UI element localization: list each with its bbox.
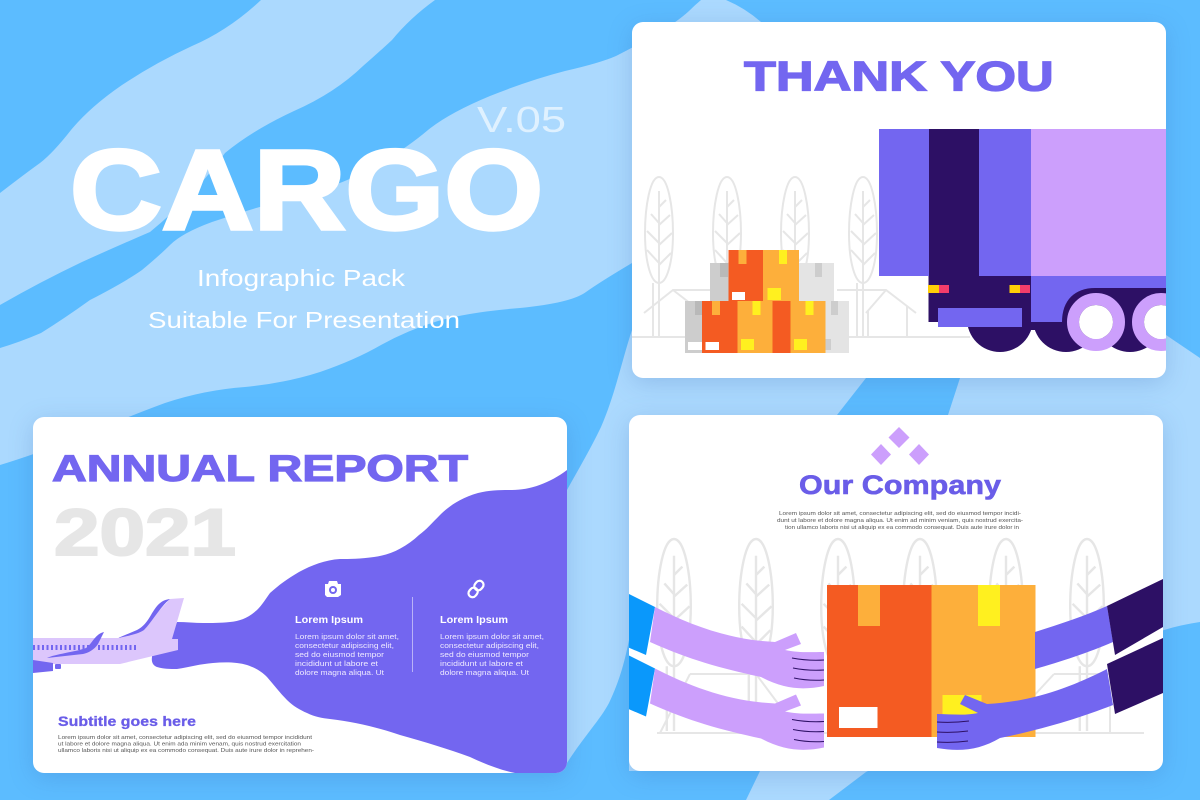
column 1 text: Lorem ipsum dolor sit amet, — [295, 632, 399, 641]
column 2 text: sed do eiusmod tempor — [440, 650, 530, 659]
lower left arm — [625, 654, 824, 750]
intro text: dunt ut labore et dolore magna aliqua. Ut enim ad minim veniam, quis nostrud exercita- — [777, 518, 1023, 524]
column 2 text — [440, 632, 544, 677]
subtitle body text: ut labore et dolore magna aliqua. Ut enim ada minim venam, quis nostrud exercitation — [58, 742, 301, 748]
intro text: tion ullamco laboris nisi ut aliquip ex ea commodo consequat. Duis aute irure dolor in — [785, 525, 1019, 531]
column divider — [412, 597, 413, 672]
background: light wave band upper — [0, 0, 435, 305]
icon: camera — [325, 581, 341, 597]
subtitle line 1: Infographic Pack — [197, 265, 406, 291]
intro text: Lorem ipsum dolor sit amet, consectetur adipiscing elit, sed do eiusmod tempor incidi- — [779, 511, 1021, 517]
subtitle body text — [58, 735, 314, 754]
icon: chain link — [467, 579, 485, 599]
column 1 heading: Lorem Ipsum — [295, 614, 363, 626]
column 2 text: incididunt ut labore et — [440, 659, 524, 668]
background: light wave band middle — [0, 0, 1000, 465]
subtitle line 2: Suitable For Presentation — [148, 307, 460, 333]
truck — [879, 129, 1184, 352]
title: cargo: CARGO — [70, 128, 543, 253]
left arms — [625, 592, 824, 750]
column 2 heading: Lorem Ipsum — [440, 614, 508, 626]
column 2 text: Lorem ipsum dolor sit amet, — [440, 632, 544, 641]
version label: V.05 — [477, 99, 566, 140]
subtitle: Subtitle goes here — [58, 714, 197, 729]
scenery: trees and houses — [657, 539, 1144, 733]
intro text — [777, 511, 1023, 531]
purple flowing shape — [152, 470, 567, 773]
right arms — [937, 579, 1163, 750]
heading: year: 2021 — [54, 496, 236, 569]
plane illustration — [33, 598, 184, 673]
box stack — [685, 250, 849, 353]
title block — [70, 99, 566, 333]
column 1 text: dolore magna aliqua. Ut — [295, 668, 385, 677]
background: blue gap between right cards — [837, 378, 960, 415]
lower right arm — [937, 638, 1163, 750]
subtitle body text: ullamco laboris nisi ut aliquip ex ea commodo consequat. Duis aute irure dolor in reprehen- — [58, 748, 314, 754]
heading: annual report: ANNUAL REPORT — [52, 448, 468, 490]
heading: thank you: THANK YOU — [744, 53, 1054, 100]
column 1 — [295, 581, 399, 677]
heading: our company: Our Company — [799, 470, 1001, 500]
upper right arm — [1035, 579, 1163, 669]
panel: our company — [625, 415, 1163, 771]
column 2 text: consectetur adipiscing elit, — [440, 641, 539, 650]
column 2 text: dolore magna aliqua. Ut — [440, 668, 530, 677]
icon: three diamonds — [871, 427, 929, 465]
large box — [827, 585, 1036, 737]
scenery: trees and houses — [632, 177, 970, 337]
panel: annual report — [33, 417, 567, 773]
subtitle body text: Lorem ipsum dolor sit amet, consectetur adipiscing elit, sed do eiusmod tempor incididunt — [58, 735, 312, 741]
background: light wave band right — [567, 300, 1200, 800]
column 1 text: incididunt ut labore et — [295, 659, 379, 668]
column 1 text: sed do eiusmod tempor — [295, 650, 385, 659]
upper left arm — [625, 592, 824, 688]
column 1 text — [295, 632, 399, 677]
column 2 — [440, 579, 544, 677]
column 1 text: consectetur adipiscing elit, — [295, 641, 394, 650]
panel: thank you — [632, 22, 1184, 378]
